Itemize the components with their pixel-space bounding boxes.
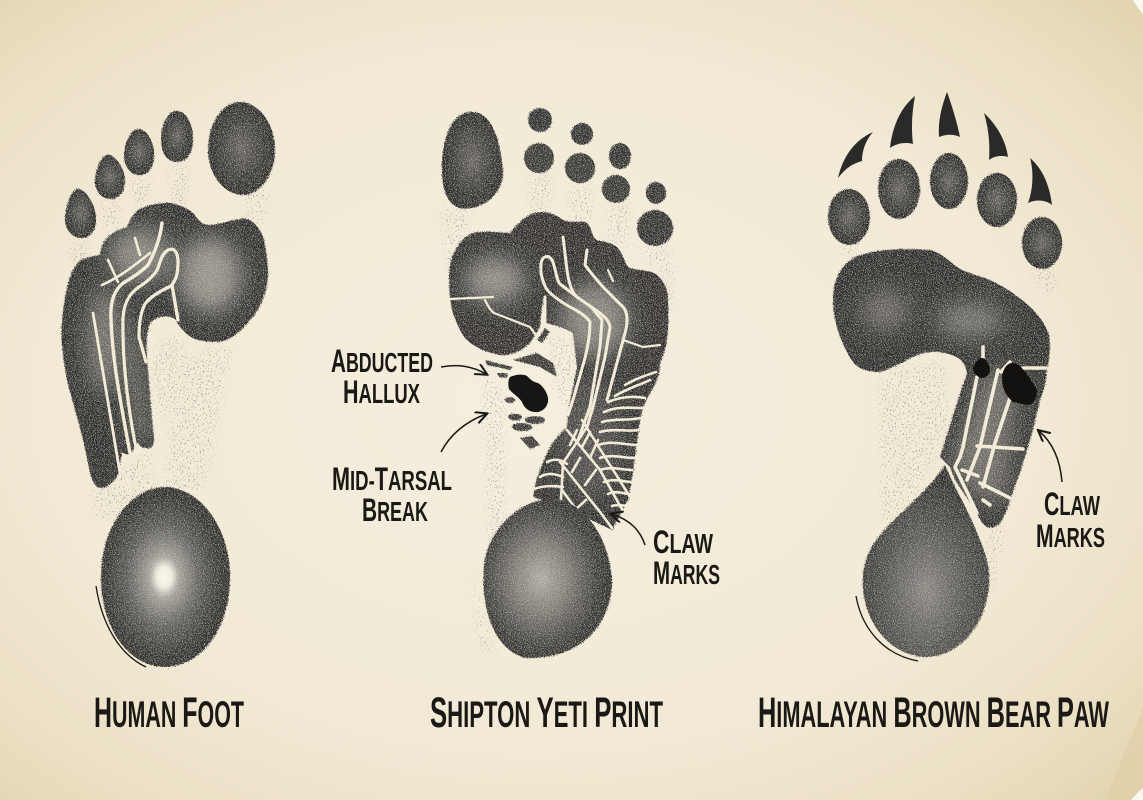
yeti mid-tarsal fragments [485, 328, 557, 449]
caption: shipton yeti print: SHIPTON YETI PRINT [430, 689, 663, 737]
human foot stipple halos [68, 165, 272, 520]
yeti heel [483, 499, 612, 658]
human foot heel [101, 487, 230, 667]
footprint: human foot [50, 102, 280, 667]
human heel curve [96, 586, 146, 667]
annotation: mid-tarsal break: BREAK [362, 492, 428, 528]
annotation: bear claw marks [1036, 431, 1105, 554]
annotation: mid-tarsal break [332, 414, 486, 528]
arrow: bear claw marks [1039, 431, 1062, 482]
annotation: mid-tarsal break: MID-TARSAL [332, 461, 452, 497]
yeti ball and sole [448, 212, 670, 531]
bear claws [838, 92, 1052, 205]
annotation: yeti claw marks [612, 514, 720, 591]
caption: human foot: HUMAN FOOT [94, 689, 244, 737]
annotation: abducted hallux: HALLUX [343, 374, 420, 410]
bear heel curve [856, 596, 918, 661]
arrow: mid-tarsal break [441, 414, 486, 452]
bear black pad marks [973, 358, 1037, 405]
yeti claw mark mesh lines [534, 372, 656, 528]
arrow: abducted hallux [441, 366, 486, 374]
bear metatarsal pad and sole [832, 248, 1051, 528]
bear stipple halos [840, 245, 1060, 600]
human foot crease lines [93, 223, 178, 473]
bear toe pads [828, 153, 1062, 269]
yeti stipple halos [440, 175, 675, 655]
yeti toes [442, 108, 673, 246]
annotation: yeti claw marks: MARKS [653, 555, 720, 591]
human foot ball and outer sole [60, 202, 269, 488]
arrow: yeti claw marks [612, 514, 645, 545]
annotation: abducted hallux: ABDUCTED [331, 343, 433, 379]
bear heel teardrop [863, 465, 989, 657]
footprint: shipton yeti print [440, 108, 680, 658]
yeti black pad marks [508, 375, 548, 412]
bear crease lines [955, 347, 1046, 513]
caption: himalayan brown bear paw: HIMALAYAN BROWN BEAR PAW [758, 689, 1109, 737]
annotation: abducted hallux [331, 343, 486, 410]
annotation: bear claw marks: CLAW [1044, 486, 1100, 522]
footprint: himalayan brown bear paw [825, 92, 1062, 661]
annotation: yeti claw marks: CLAW [653, 524, 713, 560]
human foot toes [65, 102, 275, 238]
yeti crease lines [450, 237, 660, 440]
annotation: bear claw marks: MARKS [1036, 518, 1105, 554]
